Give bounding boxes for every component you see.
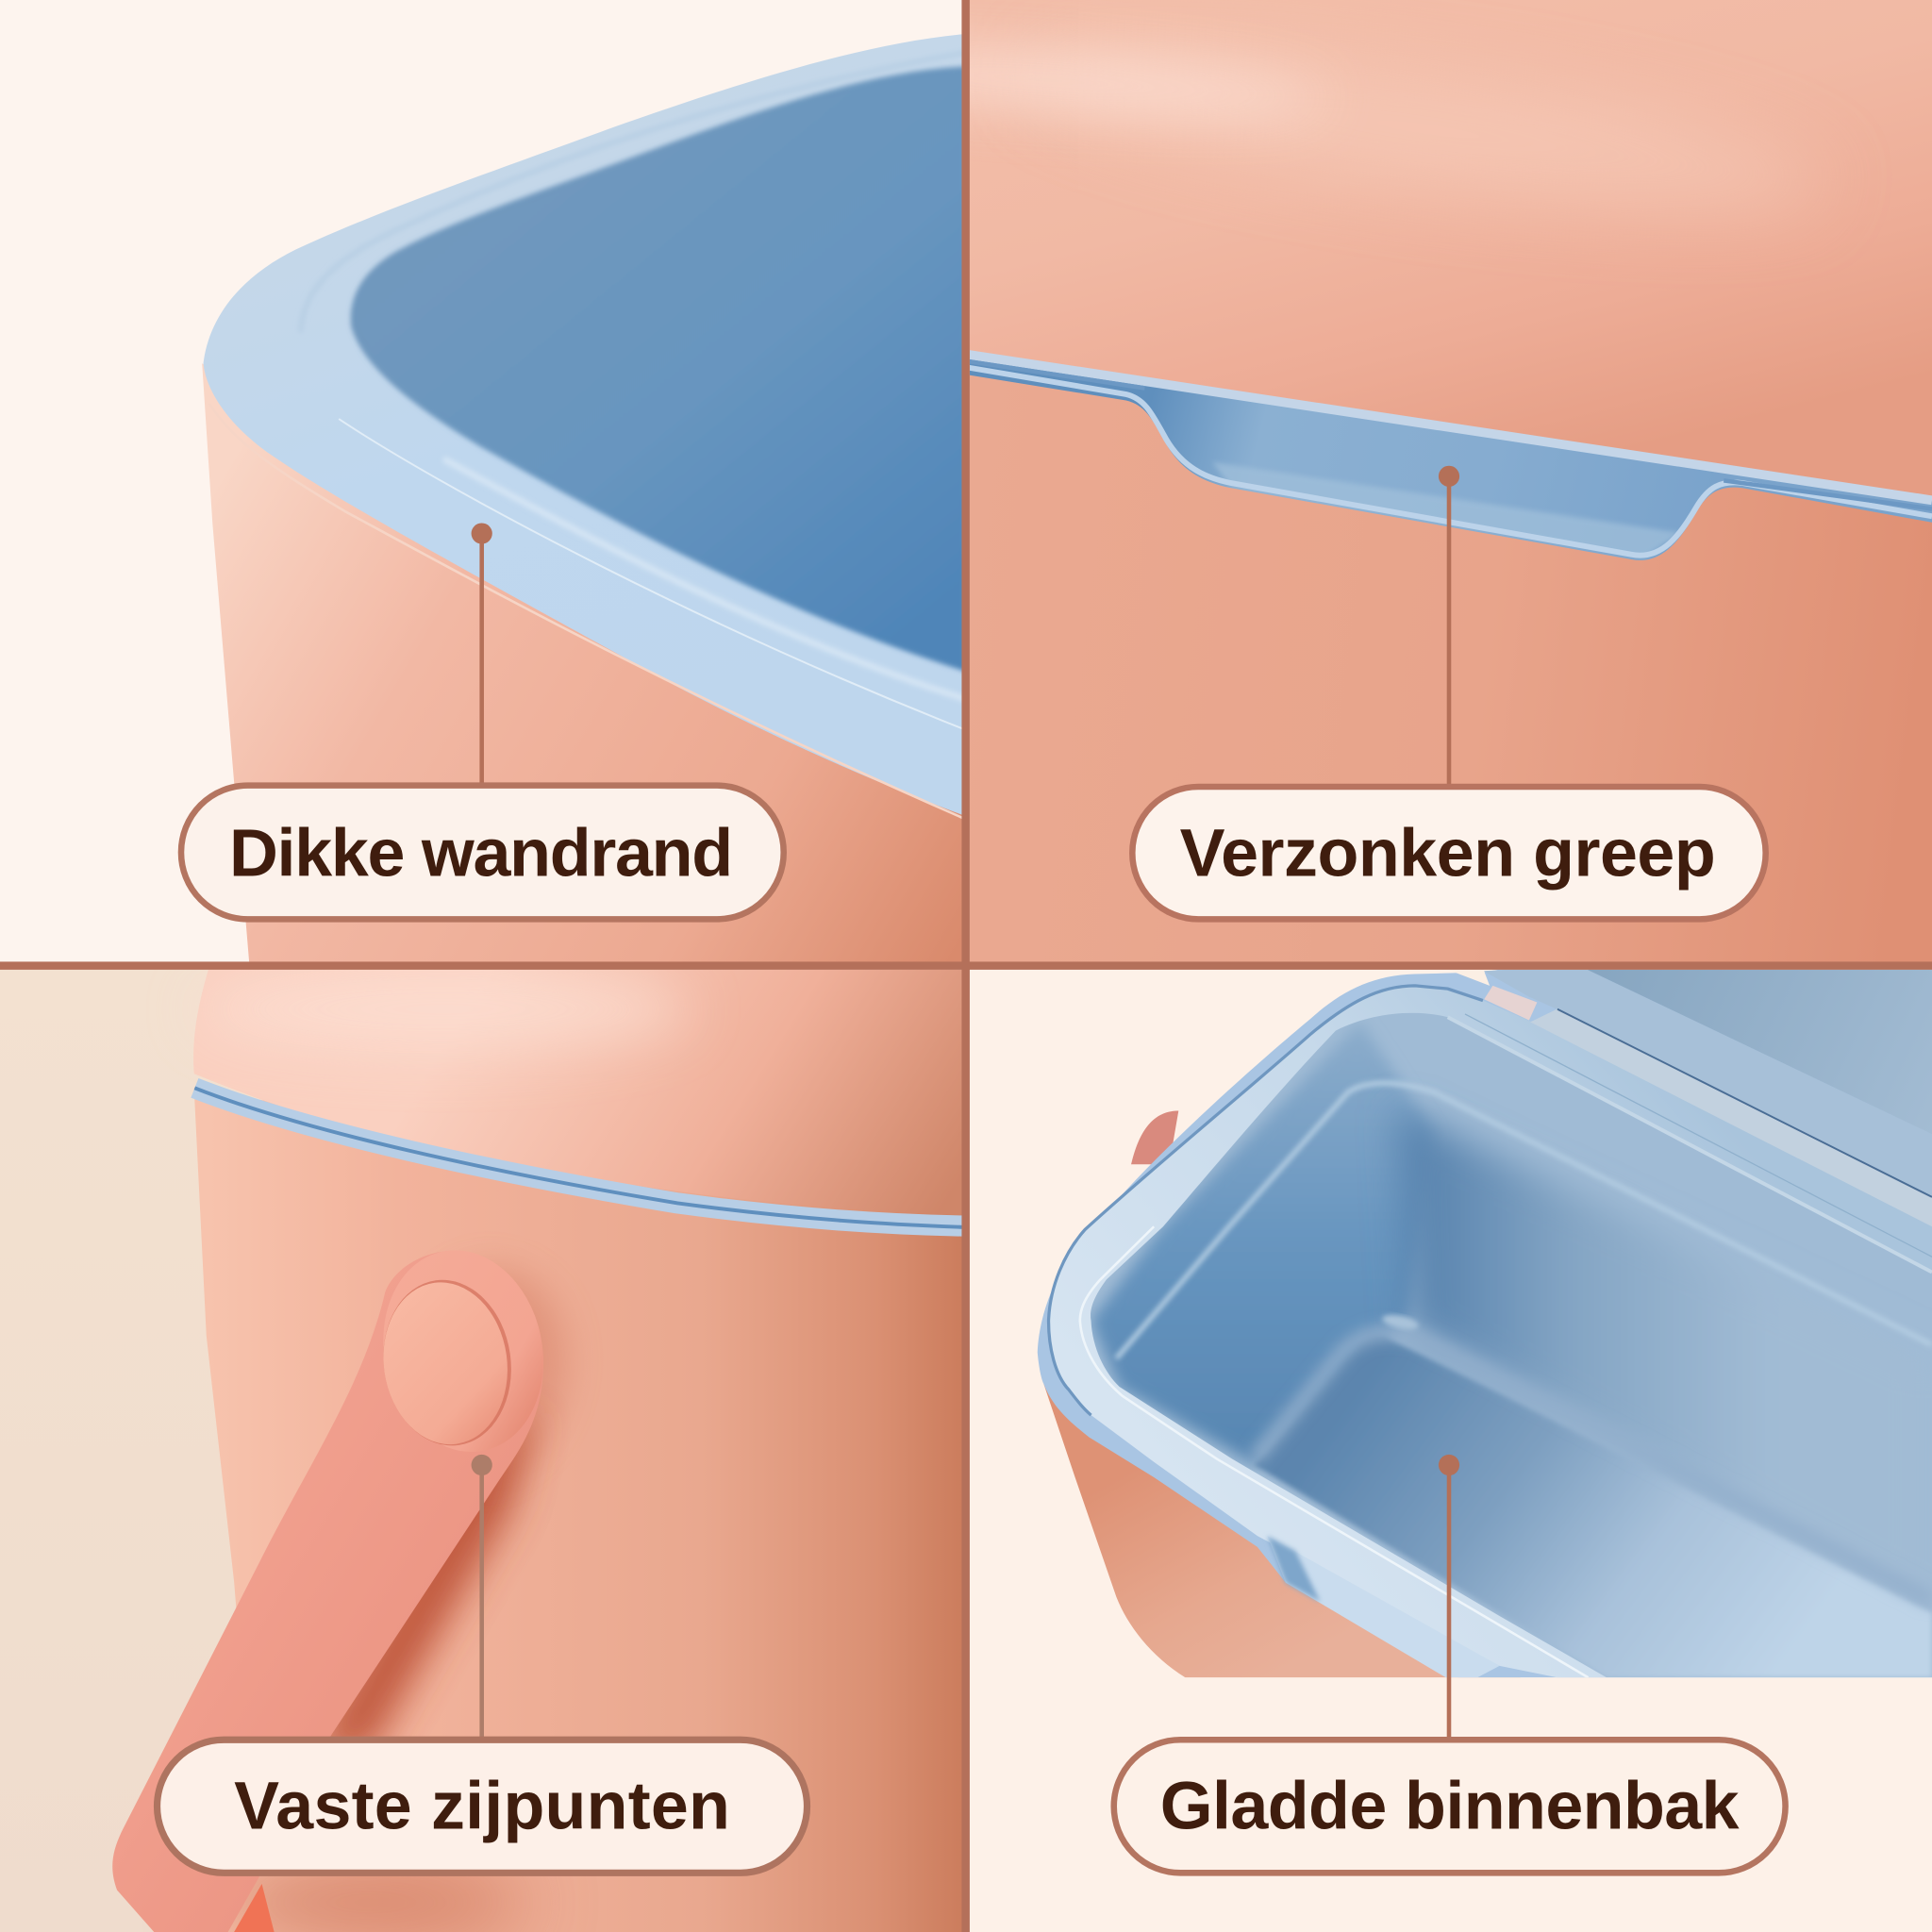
lid xyxy=(193,966,966,1215)
floor xyxy=(1255,1336,1932,1677)
callout line xyxy=(1445,1465,1453,1740)
callout line xyxy=(1445,476,1453,786)
button ring shadow xyxy=(384,1254,584,1491)
strap ring xyxy=(365,1235,561,1467)
broad lid sheen xyxy=(1229,74,1787,217)
label pill: Verzonken greep: Verzonken greep xyxy=(1180,816,1716,891)
lid highlight xyxy=(970,28,1304,132)
callout dot xyxy=(472,523,492,544)
lid strip xyxy=(1484,966,1932,1197)
dark gasket line xyxy=(1049,986,1483,1415)
strap shadow on body xyxy=(308,1409,536,1755)
panel: Vaste zijpunten xyxy=(0,966,966,1932)
grip edge highlight xyxy=(966,367,1932,556)
outer grip recess xyxy=(1267,1536,1500,1677)
rim ridge details xyxy=(291,62,962,819)
coral strap xyxy=(112,1251,543,1932)
recessed grip interior xyxy=(970,359,1932,560)
lid surface xyxy=(966,0,1932,506)
left wall xyxy=(1091,1022,1434,1465)
panel: Dikke wandrand xyxy=(177,34,962,962)
callout dot xyxy=(1439,466,1459,487)
right wall xyxy=(1397,1108,1932,1619)
grip floor band xyxy=(1212,462,1681,558)
label pill: Dikke wandrand xyxy=(181,786,784,919)
thick blue rim xyxy=(204,34,966,816)
lid hinge bar xyxy=(1530,1009,1932,1226)
callout line xyxy=(479,543,484,783)
strap peek xyxy=(1131,1110,1178,1164)
lower salmon body with grip cutout xyxy=(966,375,1932,966)
divider: vertical xyxy=(961,0,970,1932)
inner well xyxy=(966,966,1932,1677)
divider: horizontal xyxy=(0,961,1932,970)
panel background xyxy=(966,966,1932,1932)
cropped product photo xyxy=(966,966,1932,1677)
label pill: Gladde binnenbak xyxy=(1114,1740,1786,1873)
label pill: Vaste zijpunten: Vaste zijpunten xyxy=(234,1768,730,1843)
panel background xyxy=(0,966,966,1932)
label pill: Dikke wandrand: Dikke wandrand xyxy=(229,816,733,891)
seam shadow xyxy=(966,361,1932,508)
callout dot xyxy=(472,1455,492,1475)
bright inner strap peek xyxy=(234,1884,275,1932)
upper wall base xyxy=(966,966,1932,1677)
rim lines xyxy=(1080,1014,1932,1677)
floor ridges xyxy=(1116,1083,1932,1601)
label pill: Vaste zijpunten xyxy=(158,1740,808,1873)
panel: Gladde binnenbak xyxy=(966,966,1932,1932)
floor corner sheen xyxy=(1381,1312,1420,1332)
label pill: Verzonken greep xyxy=(1132,787,1766,919)
panel: Verzonken greep xyxy=(970,0,1932,962)
rivet button xyxy=(373,1272,522,1454)
box body xyxy=(154,1090,966,1932)
outer salmon box wall xyxy=(202,363,966,966)
lid bottom lip xyxy=(966,355,1932,500)
background wedge xyxy=(1448,970,1490,986)
light rim top xyxy=(1049,986,1932,1677)
callout dot xyxy=(1439,1455,1459,1475)
lid dark gap xyxy=(1557,1009,1932,1197)
panel background xyxy=(0,0,966,966)
opened lid xyxy=(1579,966,1932,1134)
blue inner well xyxy=(351,67,966,672)
outer blue rim edge xyxy=(1038,966,1932,1677)
callout line xyxy=(478,1465,485,1740)
salmon outer body xyxy=(1043,1384,1521,1677)
hinge xyxy=(1484,986,1537,1020)
lid highlight xyxy=(197,966,690,1052)
label pill: Gladde binnenbak: Gladde binnenbak xyxy=(1160,1768,1740,1843)
lower strap shadow xyxy=(209,1859,530,1932)
blue seam band xyxy=(194,1088,966,1227)
